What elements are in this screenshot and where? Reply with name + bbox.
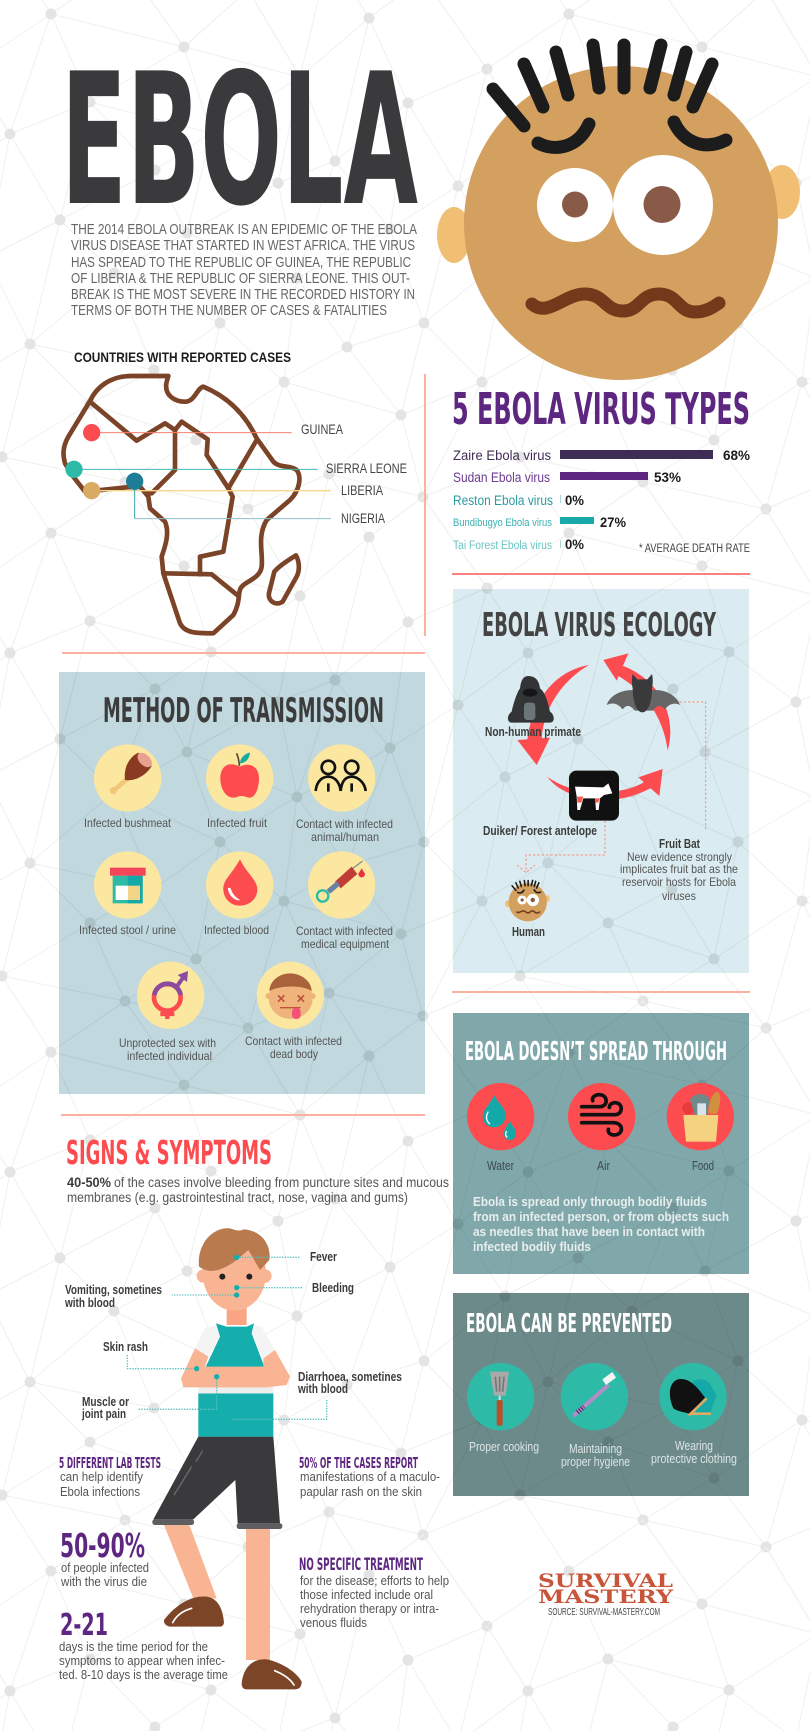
icon: water: [467, 1083, 534, 1150]
icon: dead body face: [257, 962, 324, 1029]
map labels: SIERRA LEONE: [326, 461, 407, 476]
bar chart: average death rate by virus type: [453, 447, 751, 552]
intro text block: TERMS OF BOTH THE NUMBER OF CASES & FATALITIES: [71, 303, 387, 319]
symptom labels: Skin rash: [103, 1340, 148, 1354]
spread labels: Air: [597, 1159, 610, 1173]
left shoe: [164, 1596, 224, 1627]
fact: 50% rash: 50% OF THE CASES REPORT: [299, 1454, 418, 1472]
heading: countries with reported cases: COUNTRIES WITH REPORTED CASES: [74, 349, 291, 365]
symptoms intro text: membranes (e.g. gastrointestinal tract, nose, vagina and gums): [67, 1190, 408, 1205]
spread explanation text: as needles that have been in contact with: [473, 1224, 705, 1239]
symptoms intro text: of the cases involve bleeding from puncture sites and mucous: [114, 1175, 449, 1190]
arrow: bat to primate: [603, 653, 670, 751]
symptom labels: Vomiting, sometines: [65, 1283, 162, 1297]
symptoms intro text: [67, 1175, 449, 1205]
fact: 50% rash: [299, 1454, 440, 1499]
fact: 2-21 days: ted. 8-10 days is the average time: [59, 1667, 228, 1682]
prevented labels: proper hygiene: [561, 1455, 630, 1469]
symptom labels: with blood: [64, 1296, 115, 1310]
fact: 50-90% die: of people infected: [61, 1560, 149, 1575]
icon: spatula: [467, 1363, 534, 1430]
icon: bushmeat: [94, 744, 161, 812]
left leg: [164, 1525, 217, 1598]
spread explanation text: infected bodily fluids: [473, 1239, 591, 1254]
text: 5 DIFFERENT LAB TESTS: [59, 1454, 161, 1472]
fact: no specific treatment: venous fluids: [300, 1615, 367, 1630]
fact: 5 different lab tests: Ebola infections: [60, 1484, 140, 1499]
ecology labels: viruses: [662, 889, 696, 903]
icon: people: [308, 744, 375, 812]
fact: 5 different lab tests: can help identify: [60, 1469, 143, 1484]
icon: apple: [206, 744, 273, 812]
ecology labels: Duiker/ Forest antelope: [483, 824, 597, 838]
arrow: primate to antelope: [517, 665, 589, 765]
fact: no specific treatment: rehydration therapy or intra-: [300, 1601, 439, 1616]
transmission labels: dead body: [270, 1047, 318, 1061]
transmission labels: animal/human: [311, 830, 379, 844]
fact: 50% rash: papular rash on the skin: [300, 1484, 422, 1499]
panel: ebola can be prevented: [453, 1293, 749, 1496]
arrow: antelope to bat: [547, 769, 663, 800]
ecology labels: Non-human primate: [485, 725, 581, 739]
transmission labels: Contact with infected: [296, 817, 393, 831]
fact: 50% rash: manifestations of a maculo-: [300, 1469, 440, 1484]
map labels: GUINEA: [301, 422, 343, 437]
fact: 2-21 days: days is the time period for the: [59, 1639, 208, 1654]
ecology labels: Fruit Bat: [659, 837, 701, 851]
bar chart: average death rate by virus type: 0%: [565, 492, 585, 508]
fact: 50-90% die: [60, 1526, 149, 1589]
prevented labels: Maintaining: [569, 1442, 622, 1456]
symptom marker dots and leader lines: [127, 1255, 327, 1419]
transmission labels: [79, 816, 393, 1063]
transmission labels: Contact with infected: [245, 1034, 342, 1048]
bar chart: average death rate by virus type: Sudan Ebola virus: [453, 470, 550, 485]
fact: 2-21 days: symptoms to appear when infec-: [59, 1653, 225, 1668]
icon: blood drop: [206, 851, 273, 919]
map labels: [301, 422, 407, 526]
prevented labels: protective clothing: [651, 1452, 737, 1466]
intro text block: [71, 222, 417, 319]
bar chart: average death rate by virus type: Zaire Ebola virus: [453, 448, 551, 463]
transmission labels: Contact with infected: [296, 924, 393, 938]
neck: [227, 1307, 247, 1325]
bar chart: average death rate by virus type: Reston Ebola virus: [453, 493, 553, 508]
icon: stool jar: [94, 851, 161, 919]
symptom labels: [64, 1250, 402, 1421]
transmission labels: infected individual: [127, 1049, 212, 1063]
head: [197, 1228, 272, 1311]
map labels: NIGERIA: [341, 511, 385, 526]
symptom labels: Fever: [310, 1250, 337, 1264]
intro text block: HAS SPREAD TO THE REPUBLIC OF GUINEA, THE REPUBLIC: [71, 255, 411, 271]
symptom labels: Muscle or: [82, 1395, 129, 1409]
intro text block: BREAK IS THE MOST SEVERE IN THE RECORDED HISTORY IN: [71, 287, 415, 303]
intro text block: VIRUS DISEASE THAT STARTED IN WEST AFRICA. THE VIRUS: [71, 238, 415, 254]
transmission labels: Infected stool / urine: [79, 923, 176, 937]
icon: fruit bat: [607, 674, 680, 712]
ecology cycle diagram: [508, 653, 706, 873]
prevented labels: Proper cooking: [469, 1440, 539, 1454]
intro text block: OF LIBERIA & THE REPUBLIC OF SIERRA LEONE. THIS OUT-: [71, 271, 410, 287]
ecology labels: implicates fruit bat as the: [620, 862, 738, 876]
symptom labels: Bleeding: [312, 1281, 354, 1295]
figure: boy with symptom markers: [127, 1228, 327, 1689]
icon: gender symbols: [137, 962, 204, 1029]
icon: oven mitts: [659, 1363, 727, 1430]
fact: 2-21 days: [59, 1608, 228, 1682]
map: Africa with country markers: [64, 376, 331, 633]
shorts: [152, 1437, 282, 1529]
prevented labels: Wearing: [675, 1439, 713, 1453]
icon: toothbrush: [561, 1363, 628, 1430]
spread labels: Food: [692, 1159, 714, 1173]
icon: mini human face: [505, 880, 550, 921]
fact: 2-21 days: 2-21: [60, 1608, 108, 1643]
icon: gorilla: [508, 676, 554, 723]
intro text block: THE 2014 EBOLA OUTBREAK IS AN EPIDEMIC OF THE EBOLA: [71, 222, 417, 238]
fact: no specific treatment: NO SPECIFIC TREATMENT: [299, 1555, 423, 1574]
logo: survival mastery: [538, 1570, 674, 1618]
transmission labels: Infected fruit: [207, 816, 268, 830]
prevented labels: [469, 1439, 737, 1469]
panel: ebola doesn't spread through: [453, 1013, 749, 1274]
fact: no specific treatment: for the disease; efforts to help: [300, 1573, 449, 1588]
logo: survival mastery: SURVIVAL: [538, 1570, 673, 1592]
fact: 50-90% die: 50-90%: [60, 1526, 145, 1565]
panel: ebola virus ecology: [453, 589, 749, 973]
bar chart: average death rate by virus type: 27%: [600, 514, 627, 530]
ecology labels: New evidence strongly: [627, 850, 732, 864]
transmission labels: medical equipment: [301, 937, 390, 951]
bar chart: average death rate by virus type: Bundibugyo Ebola virus: [453, 517, 552, 529]
fact: 5 different lab tests: [59, 1454, 161, 1499]
symptoms intro text: 40-50%: [67, 1175, 111, 1190]
fact: 50-90% die: with the virus die: [60, 1574, 147, 1589]
spread labels: [487, 1159, 714, 1173]
dashed link: fruit bat note: [679, 702, 706, 829]
chart note: * AVERAGE DEATH RATE: [639, 543, 750, 555]
ecology labels: [483, 725, 738, 939]
logo: survival mastery: MASTERY: [538, 1586, 674, 1608]
icon: worried face: [437, 45, 800, 380]
transmission labels: Unprotected sex with: [119, 1036, 216, 1050]
logo: survival mastery: SOURCE: SURVIVAL-MASTERY.COM: [548, 1607, 660, 1618]
bar chart: average death rate by virus type: 53%: [654, 469, 682, 485]
fact: no specific treatment: those infected include oral: [300, 1587, 433, 1602]
bar chart: average death rate by virus type: 68%: [723, 447, 751, 463]
title: EBOLA: [61, 34, 418, 246]
icon: syringe: [308, 851, 375, 919]
heading: signs and symptoms: SIGNS & SYMPTOMS: [66, 1133, 272, 1172]
transmission labels: Infected blood: [204, 923, 269, 937]
transmission heading: METHOD OF TRANSMISSION: [103, 691, 384, 730]
spread labels: Water: [487, 1159, 514, 1173]
icon: air: [568, 1083, 635, 1150]
ecology labels: reservoir hosts for Ebola: [622, 875, 736, 889]
symptom labels: joint pain: [81, 1407, 126, 1421]
transmission labels: Infected bushmeat: [84, 816, 172, 830]
icon: food bag: [667, 1083, 734, 1150]
shirt and arms: [181, 1323, 290, 1437]
spread explanation text: from an infected person, or from objects such: [473, 1209, 729, 1224]
panel: method of transmission: [59, 672, 425, 1094]
dashed arrow: antelope to human: [517, 821, 605, 873]
bar chart: average death rate by virus type: Tai Forest Ebola virus: [453, 540, 552, 552]
bar chart: average death rate by virus type: 0%: [565, 536, 585, 552]
spread explanation text: [473, 1194, 729, 1254]
right shoe: [242, 1659, 302, 1689]
map labels: LIBERIA: [341, 483, 383, 498]
spread explanation text: Ebola is spread only through bodily fluids: [473, 1194, 707, 1209]
symptom labels: with blood: [297, 1382, 348, 1396]
icon: antelope box: [569, 771, 619, 821]
right leg: [246, 1529, 270, 1660]
symptom labels: Diarrhoea, sometines: [298, 1370, 402, 1384]
fact: no specific treatment: [299, 1555, 449, 1630]
ecology labels: Human: [512, 925, 545, 939]
